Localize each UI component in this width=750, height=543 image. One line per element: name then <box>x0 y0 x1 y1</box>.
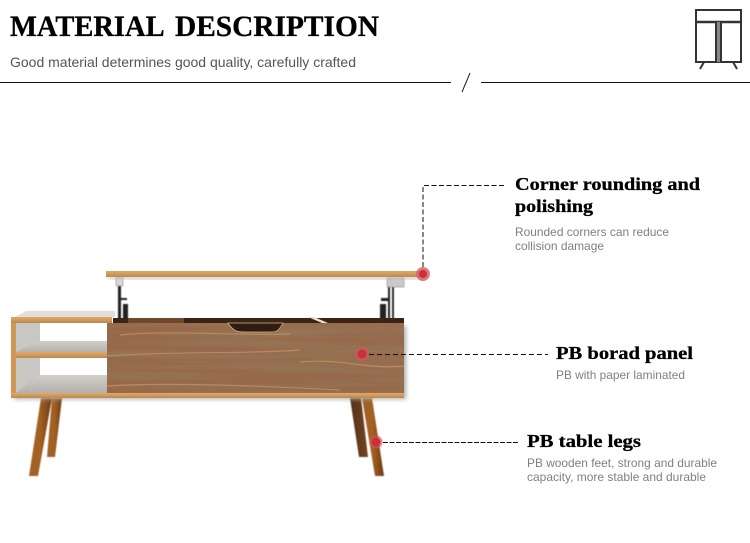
callout description: Rounded corners can reduce <box>515 225 669 239</box>
walnut front panel <box>107 323 404 393</box>
subtitle: Good material determines good quality, carefully crafted <box>10 54 356 70</box>
marker dot <box>370 436 382 448</box>
callout: PB table legs <box>370 431 720 484</box>
lifting mechanisms <box>116 277 404 323</box>
bottom plank <box>11 393 404 398</box>
marker dot <box>355 347 369 361</box>
furniture: lift-top coffee table <box>11 271 424 476</box>
callout heading: polishing <box>515 196 593 216</box>
callout: corner rounding and polishing <box>416 174 704 281</box>
icon: furniture cabinet <box>696 10 741 69</box>
callout description: PB with paper laminated <box>556 368 685 382</box>
callout heading: PB table legs <box>527 431 641 451</box>
callout heading: PB borad panel <box>556 343 693 363</box>
icon: slash divider <box>462 73 470 92</box>
lift top board <box>106 271 424 279</box>
title: MATERIAL <box>10 10 164 43</box>
callout: PB board panel <box>355 343 693 382</box>
marker dot <box>416 267 430 281</box>
left open shelf unit <box>11 311 115 398</box>
drawer interior <box>113 317 404 324</box>
body shadow <box>14 326 406 399</box>
title: DESCRIPTION <box>175 10 379 43</box>
header <box>0 10 750 92</box>
table legs <box>29 398 384 476</box>
callout heading: Corner rounding and <box>515 174 700 194</box>
callout description: collision damage <box>515 239 604 253</box>
callout description: PB wooden feet, strong and durable <box>527 456 717 470</box>
callout description: capacity, more stable and durable <box>527 470 706 484</box>
